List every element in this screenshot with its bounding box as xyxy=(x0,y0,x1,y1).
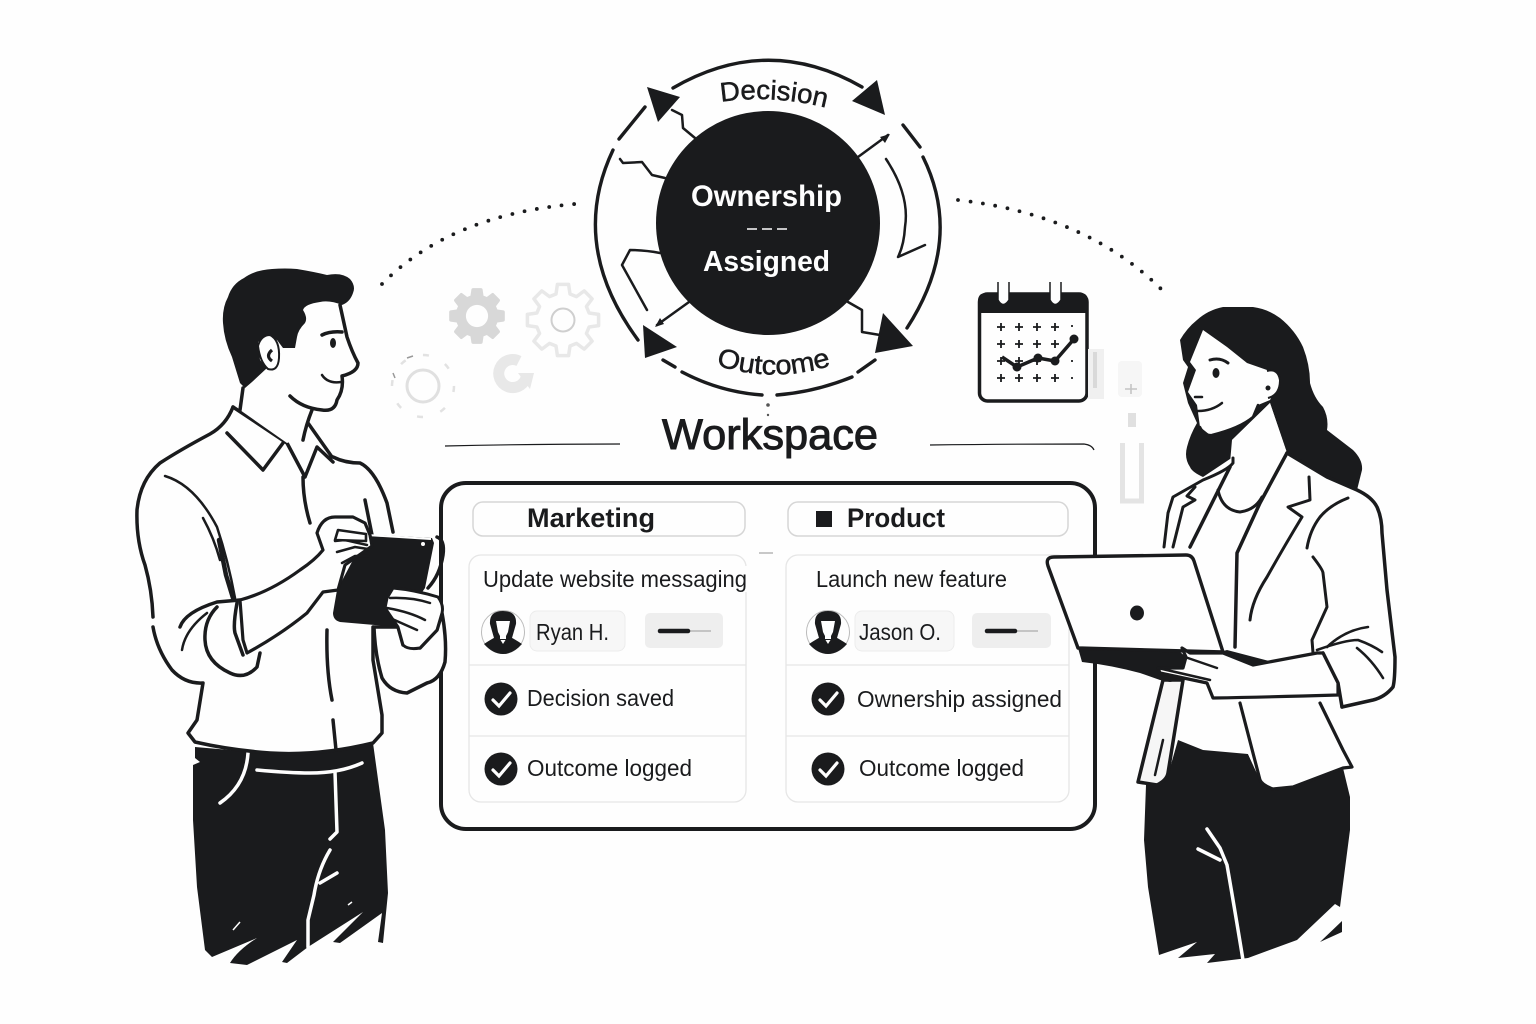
tablet xyxy=(333,530,434,627)
laptop logo xyxy=(1130,606,1144,620)
person: man with tablet xyxy=(137,268,446,965)
header: Product: Product xyxy=(847,503,945,533)
status: Ownership assigned: Ownership assigned xyxy=(857,686,1062,712)
refresh icon xyxy=(499,360,534,389)
card: Update website messaging xyxy=(469,555,752,802)
shirt outlines xyxy=(137,407,393,754)
arrowheads xyxy=(643,80,913,358)
hand on laptop xyxy=(1158,648,1338,698)
avatar xyxy=(482,610,524,654)
hair xyxy=(1180,307,1362,490)
name chip xyxy=(530,611,625,651)
panel tick xyxy=(759,552,773,554)
person: woman with laptop xyxy=(1047,307,1395,963)
trousers xyxy=(1144,740,1350,963)
upper arm and cuff xyxy=(180,600,260,675)
face xyxy=(1188,330,1278,435)
status: Outcome logged: Outcome logged xyxy=(527,755,692,781)
gear: ring with ticks xyxy=(392,355,454,417)
avatar xyxy=(806,610,850,654)
calendar icon xyxy=(978,282,1088,401)
ghost widgets right of calendar xyxy=(1088,349,1142,501)
facial lines xyxy=(1195,359,1228,411)
face xyxy=(245,305,358,410)
neck xyxy=(240,388,312,443)
header: Marketing xyxy=(473,502,745,536)
shirt body xyxy=(137,388,433,751)
laptop base xyxy=(1078,648,1273,682)
heading rules xyxy=(445,444,1094,450)
label: Outcome: Outcome xyxy=(718,349,829,375)
ear xyxy=(258,335,279,370)
name chip: Ryan H. xyxy=(536,619,609,645)
calendar rings xyxy=(998,282,1061,304)
far forearm xyxy=(374,613,446,693)
name chip: Jason O. xyxy=(859,619,941,645)
column: Product xyxy=(786,502,1069,802)
hub text: Assigned: Assigned xyxy=(703,246,830,278)
eye xyxy=(1212,368,1220,378)
cycle diagram xyxy=(594,58,942,397)
gear: filled xyxy=(451,290,503,342)
task title: Launch new feature xyxy=(816,566,1007,592)
heading: Workspace: Workspace xyxy=(662,411,878,459)
ear xyxy=(1267,370,1280,398)
status: Decision saved: Decision saved xyxy=(527,685,674,711)
center hub xyxy=(656,111,880,335)
calendar trend line xyxy=(1002,334,1078,372)
connector dots under cycle xyxy=(766,403,770,416)
status: Outcome logged xyxy=(484,752,692,786)
far arm edge xyxy=(428,537,443,588)
hand on tablet top xyxy=(240,517,372,653)
face line and features xyxy=(290,305,358,410)
progress chip xyxy=(645,613,723,648)
hanging jacket strip xyxy=(1138,680,1183,785)
task title: Update website messaging xyxy=(483,566,747,592)
hub dashes xyxy=(747,228,787,230)
eye xyxy=(330,338,336,348)
laptop lid xyxy=(1047,555,1223,652)
laptop xyxy=(1047,555,1273,682)
status: Decision saved xyxy=(484,682,674,716)
cycle outer ring segments xyxy=(595,60,940,395)
dotted arc: right xyxy=(958,200,1166,294)
header: Marketing: Marketing xyxy=(527,503,655,533)
hand under tablet xyxy=(385,588,442,649)
earring dot xyxy=(1266,386,1270,390)
status: Ownership assigned xyxy=(812,682,1062,716)
name chip xyxy=(855,611,954,651)
label: Decision: Decision xyxy=(720,80,827,108)
panel: workspace dashboard xyxy=(441,483,1095,829)
hub text: Ownership: Ownership xyxy=(691,180,842,213)
progress chip xyxy=(972,613,1051,648)
status: Outcome logged: Outcome logged xyxy=(859,755,1024,781)
trousers xyxy=(193,743,388,965)
hair xyxy=(223,268,354,388)
card: Launch new feature xyxy=(786,555,1069,802)
dotted arc: left xyxy=(382,204,575,284)
jaw line xyxy=(1200,405,1258,435)
calendar day marks xyxy=(997,323,1073,382)
ghost gears xyxy=(392,284,599,417)
column: Marketing xyxy=(469,502,752,802)
gear: outlined xyxy=(527,284,599,356)
small arrow tips xyxy=(655,134,890,327)
inner connector lines xyxy=(620,110,925,335)
jacket and shirt lines xyxy=(1164,453,1395,789)
jacket and shirt body xyxy=(1138,403,1395,789)
header: Product xyxy=(788,502,1068,536)
status: Outcome logged xyxy=(812,752,1024,786)
collar xyxy=(227,407,333,523)
